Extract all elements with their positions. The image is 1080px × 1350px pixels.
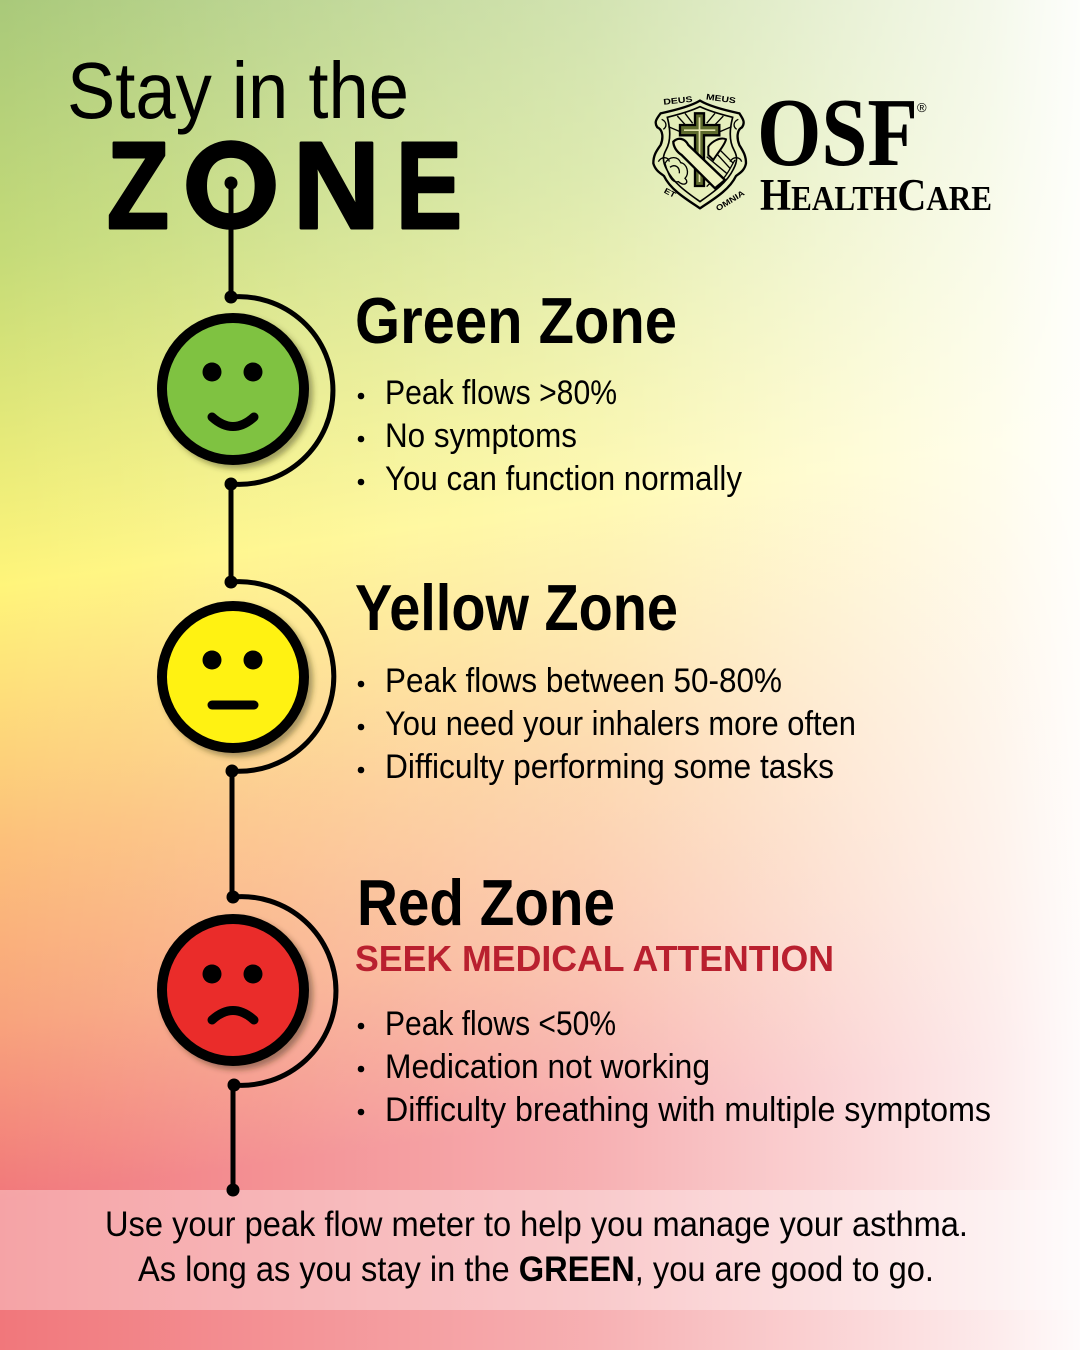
icon: shield crest: MEUS — [705, 91, 737, 106]
list: green zone bullets — [358, 374, 742, 498]
heading: Yellow Zone: Yellow Zone — [355, 571, 678, 644]
icon: shield crest: ET — [662, 186, 677, 200]
logo wordmark HealthCare: HEALTHCARE — [760, 170, 992, 220]
list: yellow zone bullets: Peak flows between 50-80% — [385, 662, 782, 700]
list: green zone bullets: No symptoms — [385, 417, 577, 455]
icon: yellow neutral face — [161, 605, 313, 757]
list: green zone bullets: You can function normally — [385, 460, 742, 498]
icon: red sad face — [161, 918, 313, 1070]
logo: OSF HealthCare — [653, 79, 992, 220]
footer band — [0, 1190, 1080, 1310]
list: green zone bullets: Peak flows >80% — [385, 374, 617, 412]
footer text: As long as you stay in the GREEN, you are good to go. — [138, 1250, 934, 1289]
list: red zone bullets: Difficulty breathing with multiple symptoms — [385, 1091, 991, 1129]
list: yellow zone bullets — [358, 662, 856, 786]
icon: green smiley face — [161, 317, 313, 469]
crest motto: DEUS — [663, 94, 694, 107]
title: ZONE: O — [185, 121, 277, 253]
list: red zone bullets: Peak flows <50% — [385, 1005, 616, 1043]
icon: shield crest — [653, 91, 746, 213]
list: red zone bullets — [358, 1005, 991, 1129]
heading: Red Zone: Red Zone — [357, 866, 615, 939]
footer text — [105, 1205, 968, 1289]
icon: shield crest: OMNIA — [714, 188, 746, 213]
heading: Green Zone: Green Zone — [355, 284, 677, 357]
title: ZONE: Z — [107, 118, 169, 255]
list: yellow zone bullets: You need your inhalers more often — [385, 705, 856, 743]
title: ZONE: E — [396, 118, 462, 255]
timeline connector — [224, 176, 336, 1196]
list: yellow zone bullets: Difficulty performing some tasks — [385, 748, 834, 786]
footer text: Use your peak flow meter to help you manage your asthma. — [105, 1205, 968, 1244]
logo wordmark OSF: OSF — [757, 79, 918, 186]
title: Stay in the: Stay in the — [67, 46, 409, 135]
title: ZONE — [107, 118, 462, 255]
panel: red zone — [355, 866, 991, 1129]
registered mark: ® — [917, 100, 927, 115]
panel: yellow zone — [355, 571, 856, 786]
title: ZONE: N — [293, 118, 380, 255]
panel: green zone — [355, 284, 742, 498]
subheading: seek medical attention: SEEK MEDICAL ATTENTION — [355, 938, 834, 979]
list: red zone bullets: Medication not working — [385, 1048, 710, 1086]
